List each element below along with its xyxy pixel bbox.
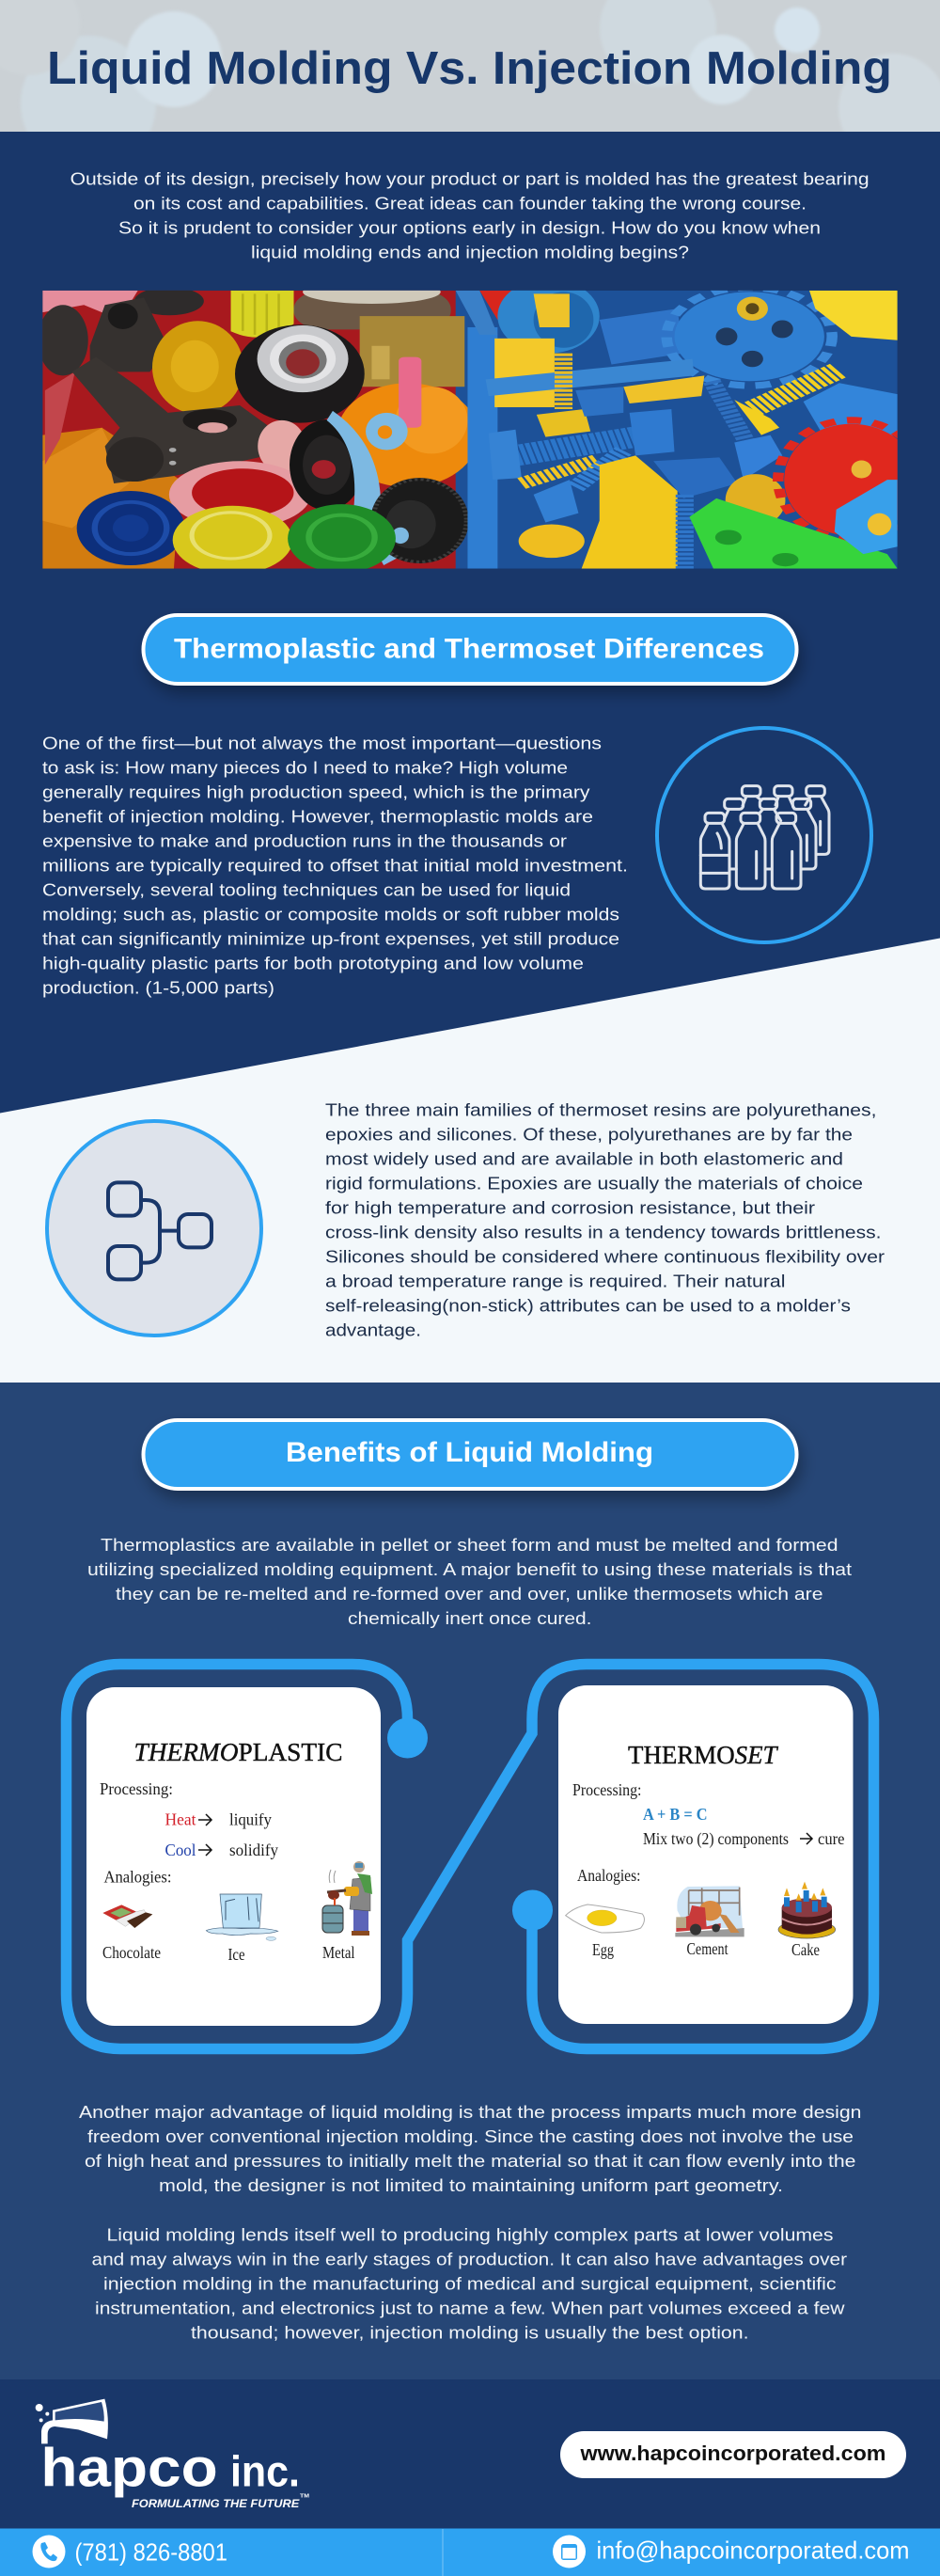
text block: production volume xyxy=(42,734,628,997)
intro text block xyxy=(70,169,870,261)
text block: thermoset resin families: a broad temperature range is required. Their natural xyxy=(325,1272,786,1290)
text block: production volume: high-quality plastic parts for both prototyping and low volume xyxy=(42,954,584,972)
text block: thermoset resin families: The three main families of thermoset resins are polyurethanes, xyxy=(325,1100,876,1119)
text block: production volume: millions are typically required to offset that initial mold investment. xyxy=(42,856,628,875)
text block: design freedom: freedom over conventional injection molding. Since the casting does not involve the use xyxy=(87,2126,854,2146)
text block: low volume advantages: and may always win in the early stages of production. It can also have advantages over xyxy=(92,2250,847,2268)
processing list: Analogies: xyxy=(103,1868,171,1887)
text block: thermoset resin families: epoxies and silicones. Of these, polyurethanes are by far the xyxy=(325,1125,853,1144)
logo: hapco inc.: FORMULATING THE FUTURE xyxy=(132,2497,300,2510)
heading pill: Benefits of Liquid Molding xyxy=(143,1420,797,1489)
text block: low volume advantages xyxy=(92,2225,847,2342)
text block: production volume: to ask is: How many pieces do I need to make? High volume xyxy=(42,758,568,777)
card heading: THERMOSET: THERMOSET xyxy=(628,1741,778,1769)
processing list: cure xyxy=(818,1829,845,1848)
text block: production volume: Conversely, several tooling techniques can be used for liquid xyxy=(42,880,571,899)
card: thermoset xyxy=(558,1685,854,2024)
text block: design freedom xyxy=(79,2102,861,2195)
text block: thermoset resin families: advantage. xyxy=(325,1320,421,1339)
analogy labels xyxy=(592,1939,820,1959)
logo: hapco inc.: inc. xyxy=(230,2446,300,2495)
processing list: A + B = C xyxy=(643,1805,707,1824)
text block: production volume: molding; such as, plastic or composite molds or soft rubber molds xyxy=(42,905,619,924)
text block: production volume: benefit of injection molding. However, thermoplastic molds are xyxy=(42,807,593,826)
icon: fried egg xyxy=(566,1904,644,1933)
text block: low volume advantages: thousand; however, injection molding is usually the best option. xyxy=(191,2323,748,2342)
intro text block: Outside of its design, precisely how your product or part is molded has the greatest bearing xyxy=(70,169,870,188)
card heading: THERMOPLASTIC: THERMOPLASTIC xyxy=(133,1738,342,1766)
text block: low volume advantages: injection molding in the manufacturing of medical and surgical equipment, scientific xyxy=(103,2274,836,2293)
icon: cement truck xyxy=(675,1886,744,1936)
text block: thermoset resin families: cross-link density also results in a tendency towards brittleness. xyxy=(325,1223,882,1241)
icon: melting ice xyxy=(206,1894,278,1940)
processing list: Processing: xyxy=(100,1779,173,1798)
logo: hapco inc.: TM xyxy=(300,2493,310,2499)
text block: design freedom: Another major advantage of liquid molding is that the process imparts much more design xyxy=(79,2102,861,2122)
text block: production volume: One of the first—but not always the most important—questions xyxy=(42,734,602,752)
heading pill: Thermoplastic and Thermoset Differences: Thermoplastic and Thermoset Differences xyxy=(174,634,764,664)
heading pill: Thermoplastic and Thermoset Differences xyxy=(143,615,797,684)
text block: low volume advantages: instrumentation, and electronics just to name a few. When part volumes exceed a few xyxy=(95,2299,845,2317)
title: Liquid Molding Vs. Injection Molding xyxy=(47,43,892,94)
email address: info@hapcoincorporated.com xyxy=(596,2536,910,2564)
processing list xyxy=(100,1779,278,1887)
text block: thermoplastics forms: utilizing specialized molding equipment. A major benefit to using these materials is that xyxy=(87,1559,852,1579)
analogy labels: Chocolate xyxy=(102,1943,161,1962)
logo: hapco inc. xyxy=(36,2399,310,2510)
text block: thermoplastics forms xyxy=(87,1535,852,1628)
text block: thermoplastics forms: they can be re-melted and re-formed over and over, unlike thermosets which are xyxy=(116,1584,823,1604)
icon: phone xyxy=(32,2536,66,2568)
text block: design freedom: mold, the designer is not limited to maintaining uniform part geometry. xyxy=(159,2175,783,2195)
header banner xyxy=(0,0,940,132)
photo collage: molded plastic parts xyxy=(38,279,924,575)
phone number: (781) 826-8801 xyxy=(75,2537,227,2566)
text block: production volume: production. (1-5,000 parts) xyxy=(42,978,274,997)
analogy labels xyxy=(102,1943,355,1964)
text block: low volume advantages: Liquid molding lends itself well to producing highly complex parts at lower volumes xyxy=(107,2225,833,2244)
card: thermoplastic xyxy=(86,1687,381,2026)
icon: birthday cake xyxy=(778,1882,836,1938)
intro text block: So it is prudent to consider your options early in design. How do you know when xyxy=(118,218,821,237)
icon: chocolate bar xyxy=(102,1904,152,1928)
processing list: Heat xyxy=(165,1810,196,1828)
icon: email window xyxy=(553,2536,586,2568)
analogy labels: Cement xyxy=(686,1939,728,1958)
heading pill: Benefits of Liquid Molding: Benefits of Liquid Molding xyxy=(286,1437,653,1468)
analogy labels: Egg xyxy=(592,1940,614,1959)
text block: thermoset resin families xyxy=(325,1100,885,1339)
text block: production volume: expensive to make and production runs in the thousands or xyxy=(42,831,567,850)
icon: metal worker pouring xyxy=(322,1861,372,1936)
text block: production volume: generally requires high production speed, which is the primary xyxy=(42,782,590,801)
analogy labels: Ice xyxy=(227,1945,245,1964)
intro text block: liquid molding ends and injection molding begins? xyxy=(251,243,689,261)
icon: bottles in circle xyxy=(657,728,871,942)
text block: thermoset resin families: most widely used and are available in both elastomeric and xyxy=(325,1149,843,1168)
website pill xyxy=(560,2431,906,2478)
processing list: Mix two (2) components xyxy=(643,1829,789,1848)
processing list: liquify xyxy=(229,1810,272,1828)
processing list: Processing: xyxy=(572,1780,641,1799)
processing list: Cool xyxy=(165,1841,196,1859)
processing list: solidify xyxy=(229,1841,278,1859)
processing list: Analogies: xyxy=(577,1866,641,1885)
analogy labels: Metal xyxy=(322,1943,355,1962)
analogy labels: Cake xyxy=(791,1940,820,1959)
text block: production volume: that can significantly minimize up-front expenses, yet still produce xyxy=(42,929,619,948)
intro text block: on its cost and capabilities. Great ideas can founder taking the wrong course. xyxy=(133,194,807,213)
text block: thermoset resin families: Silicones should be considered where continuous flexibility over xyxy=(325,1247,885,1266)
contact bar xyxy=(0,2528,940,2576)
text block: thermoset resin families: rigid formulations. Epoxies are usually the materials of choice xyxy=(325,1174,863,1193)
text block: thermoplastics forms: chemically inert once cured. xyxy=(348,1608,592,1628)
logo: hapco inc.: hapco xyxy=(40,2438,218,2498)
text block: thermoset resin families: for high temperature and corrosion resistance, but their xyxy=(325,1198,815,1217)
text block: thermoplastics forms: Thermoplastics are available in pellet or sheet form and must be melted and formed xyxy=(101,1535,838,1555)
icon: flow diagram in circle xyxy=(47,1121,261,1335)
website pill: www.hapcoincorporated.com xyxy=(579,2442,885,2465)
connector line framing the two comparison cards xyxy=(66,1665,874,2048)
text block: design freedom: of high heat and pressures to initially melt the material so that it can flow evenly into the xyxy=(85,2151,855,2171)
processing list xyxy=(572,1780,845,1885)
text block: thermoset resin families: self-releasing(non-stick) attributes can be used to a molder’s xyxy=(325,1296,851,1315)
